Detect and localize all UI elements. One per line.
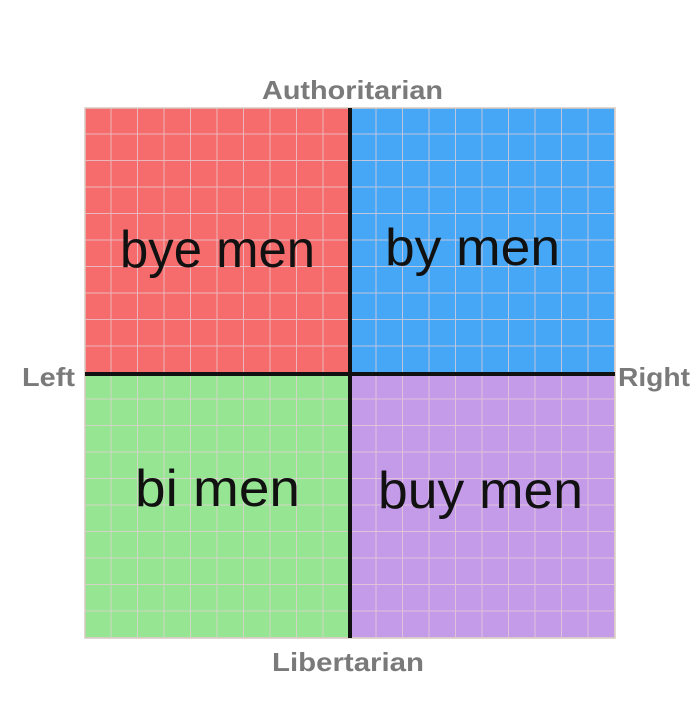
quadrant text: buy men: buy men bbox=[378, 462, 583, 520]
quadrant: authoritarian right (blue) bbox=[350, 108, 615, 374]
quadrant: authoritarian left (red) bbox=[85, 108, 350, 374]
axes lines bbox=[85, 108, 615, 638]
quadrant text: bye men: bye men bbox=[120, 221, 315, 279]
quadrant: libertarian right (purple) bbox=[350, 374, 615, 638]
quadrant text: bi men: bi men bbox=[135, 460, 300, 518]
label: Right: Right bbox=[618, 362, 690, 392]
label: Left: Left bbox=[22, 362, 75, 392]
label: Libertarian: Libertarian bbox=[272, 647, 424, 677]
label: Authoritarian: Authoritarian bbox=[262, 75, 443, 105]
quadrant text: by men: by men bbox=[385, 219, 560, 277]
quadrant: libertarian left (green) bbox=[85, 374, 350, 638]
